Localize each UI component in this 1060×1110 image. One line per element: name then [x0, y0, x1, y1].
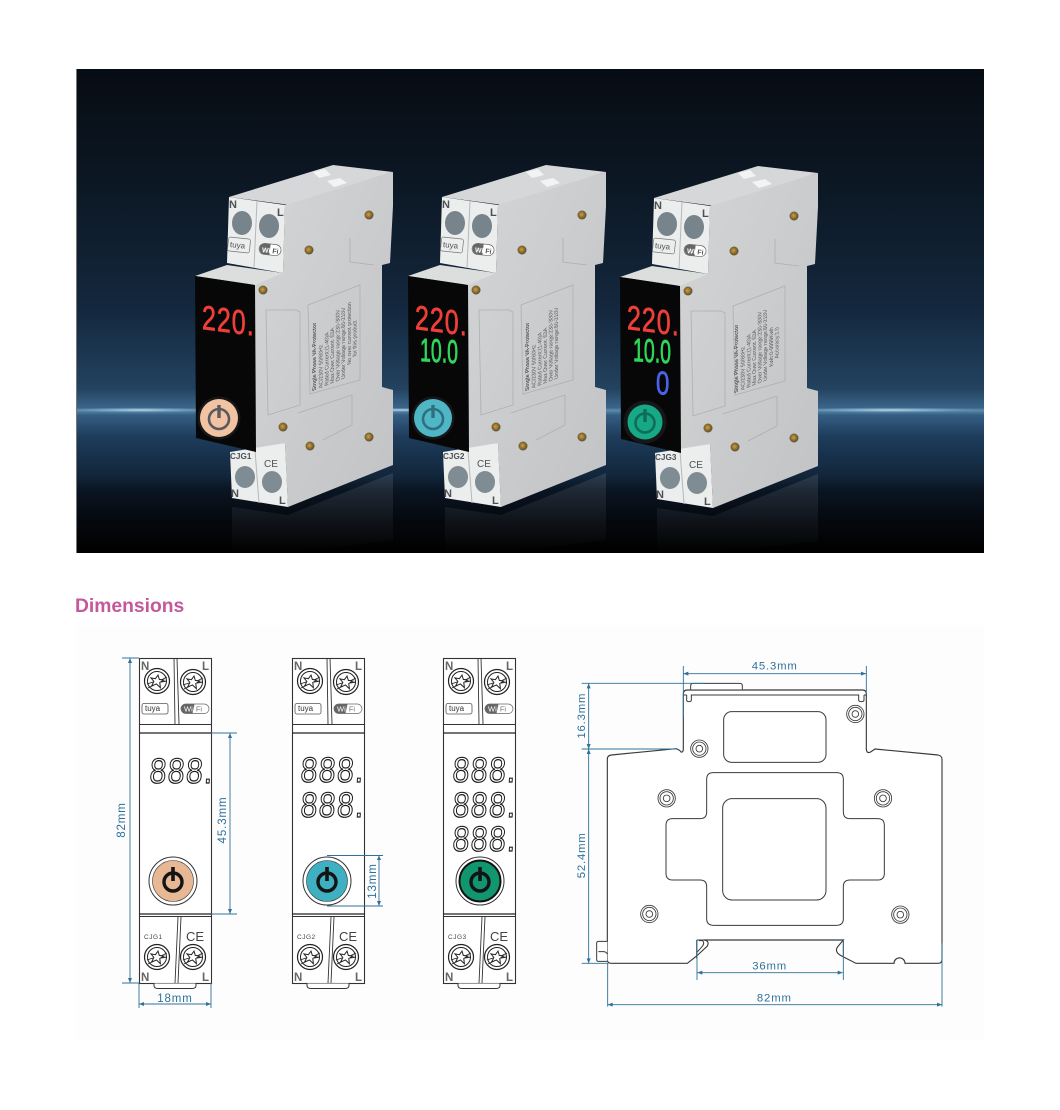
product label: AC/230V 50/60Hz	[741, 345, 746, 391]
product label: Single Phase VA-Protector	[312, 320, 318, 392]
terminal labels: CJG2	[443, 452, 465, 461]
dimension: 52.4mm	[576, 749, 608, 963]
seven-segment digits: 888.	[299, 750, 367, 790]
terminal labels: CE	[689, 460, 703, 471]
body outline	[607, 690, 942, 963]
terminal text	[445, 661, 513, 984]
terminal labels: L	[702, 208, 709, 220]
seven-segment digits: 888.	[451, 819, 519, 859]
terminal text: L	[506, 661, 513, 673]
dimension: 18mm	[139, 983, 211, 1008]
product label: Accuracy:1.0	[775, 326, 780, 359]
product label: Rated Current:(1-40)A	[325, 331, 330, 387]
terminal text: L	[202, 661, 209, 673]
terminal text: N	[294, 661, 302, 673]
terminal labels: CJG1	[230, 452, 252, 461]
reflection	[445, 473, 606, 553]
seven-segment digits: 888.	[148, 751, 216, 791]
dimension: 45.3mm: 45.3mm	[217, 797, 229, 843]
hero background	[76, 69, 984, 553]
terminal labels: L	[492, 495, 499, 507]
panel: dimension drawings	[76, 625, 984, 1040]
product label: AC/230V 50/60Hz	[532, 343, 537, 389]
terminal text: Wi Fi	[488, 704, 506, 714]
terminal text: tuya	[298, 704, 314, 713]
drawing: side view	[576, 661, 942, 1007]
dimension: 82mm	[116, 658, 139, 983]
terminal text: L	[202, 972, 209, 984]
drawing: CJG2 front view	[292, 658, 383, 988]
terminal labels	[442, 199, 499, 507]
seven-segment digits: 888.	[299, 785, 367, 825]
terminal labels: tuya	[655, 241, 671, 252]
seven-segment digits	[299, 750, 367, 825]
terminal text: L	[506, 972, 513, 984]
terminal text: N	[445, 661, 453, 673]
display: 220.: 220.	[415, 299, 468, 344]
product label: No over current protection	[347, 301, 353, 366]
terminal labels: L	[704, 496, 711, 508]
product label: Under Voltage range:80-210V	[763, 308, 769, 382]
seven-segment digits: 888.	[451, 785, 519, 825]
terminal labels: tuya	[443, 240, 459, 251]
terminal text: L	[355, 661, 362, 673]
dimension: 45.3mm: 45.3mm	[752, 661, 798, 673]
product label: Kwh:0-9999Kwh	[769, 326, 775, 368]
power button	[303, 857, 351, 905]
top inner edge	[683, 695, 866, 702]
product label: Single Phase VA-Protector	[734, 322, 740, 394]
dimension: 36mm	[697, 940, 843, 980]
terminal labels	[654, 200, 711, 508]
dimension: 82mm	[608, 943, 942, 1007]
terminal text: CE	[490, 929, 508, 944]
terminal labels: L	[277, 207, 284, 219]
terminal text: CE	[186, 929, 204, 944]
seven-segment digits: 888.	[451, 750, 519, 790]
inner recess	[723, 799, 826, 900]
terminal text: CE	[339, 929, 357, 944]
terminal labels: N	[654, 200, 662, 212]
terminal text: L	[355, 972, 362, 984]
drawing: CJG3 front view	[443, 658, 519, 988]
terminal text: N	[445, 972, 453, 984]
terminal text: N	[294, 972, 302, 984]
terminal text: Wi Fi	[184, 704, 202, 714]
seven-segment digits	[451, 750, 519, 859]
terminal text: Wi Fi	[337, 704, 355, 714]
terminal text: CJG2	[297, 934, 316, 941]
product label: Over Voltage range:230-300V	[549, 308, 554, 382]
display: 220.: 220.	[627, 299, 680, 344]
terminal labels: N	[229, 199, 237, 211]
dimension: 13mm: 13mm	[367, 863, 379, 899]
terminal labels: tuya	[230, 240, 246, 251]
product label	[312, 299, 358, 392]
device: CJG1 photo	[195, 165, 393, 553]
terminal labels: CJG3	[655, 453, 677, 462]
display: 10.0: 10.0	[420, 332, 458, 371]
dimension: 13mm	[327, 856, 383, 906]
display: 0: 0	[656, 365, 669, 403]
terminal labels: N	[231, 488, 239, 500]
terminal text: N	[141, 972, 149, 984]
drawing panel background	[76, 625, 984, 1040]
dimension: 16.3mm	[576, 683, 703, 749]
product label: Max Over Current: 63A	[543, 326, 549, 384]
hero photo panel	[70, 69, 984, 553]
display: 10.0: 10.0	[633, 332, 671, 371]
product label: Max Over Current: 63A	[330, 326, 336, 384]
terminal text	[141, 661, 209, 984]
label recess	[724, 712, 826, 762]
product label: Under Voltage range:80-210V	[341, 306, 347, 380]
mounting screws	[641, 705, 909, 923]
terminal labels: L	[279, 495, 286, 507]
product label: for this product	[353, 319, 358, 357]
horizon glow	[70, 408, 980, 412]
heading: Dimensions: Dimensions	[75, 596, 184, 617]
terminal text: CJG3	[448, 934, 467, 941]
cross recess	[666, 773, 884, 925]
terminal text: tuya	[145, 704, 161, 713]
display: 220.: 220.	[202, 299, 255, 344]
product label	[734, 303, 780, 394]
terminal labels	[229, 199, 286, 507]
terminal text: N	[141, 661, 149, 673]
product label: AC/230V 50/60Hz	[319, 343, 324, 389]
dimension: 45.3mm	[211, 733, 237, 914]
latch	[597, 941, 607, 961]
power button	[412, 396, 454, 440]
dimension: 82mm: 82mm	[116, 802, 128, 838]
dimension: 82mm: 82mm	[757, 992, 792, 1004]
product label	[525, 306, 560, 392]
power button	[198, 396, 240, 440]
product label: Rated Current:(1-40)A	[538, 331, 543, 387]
product label: Max Over Current: 63A	[752, 328, 758, 386]
power button	[149, 857, 197, 905]
top tab	[691, 683, 742, 689]
product label: Under Voltage range:80-210V	[554, 306, 560, 380]
terminal text: CJG1	[144, 934, 163, 941]
terminal labels: N	[444, 488, 452, 500]
terminal labels: CE	[264, 459, 278, 470]
terminal text: tuya	[449, 704, 465, 713]
product label: Over Voltage range:230-300V	[758, 310, 763, 384]
terminal labels: Wi Fi	[475, 247, 492, 256]
terminal labels: CE	[477, 459, 491, 470]
product label: Over Voltage range:230-300V	[336, 308, 341, 382]
dimension: 18mm: 18mm	[157, 993, 193, 1005]
reflection	[232, 473, 393, 553]
dimension: 45.3mm	[683, 661, 866, 717]
drawing: CJG1 front view	[116, 658, 237, 1008]
terminal labels: L	[490, 207, 497, 219]
product label: Single Phase VA-Protector	[525, 320, 531, 392]
dimension: 36mm: 36mm	[752, 960, 787, 972]
rail clip	[697, 940, 843, 958]
terminal labels: Wi Fi	[262, 247, 279, 256]
power button	[624, 400, 666, 444]
power button	[456, 857, 504, 905]
terminal labels: N	[442, 199, 450, 211]
terminal text	[294, 661, 362, 984]
dimension: 16.3mm: 16.3mm	[576, 693, 588, 739]
product label: Rated Current:(1-40)A	[747, 333, 752, 389]
device: CJG2 photo	[408, 165, 606, 553]
terminal labels: Wi Fi	[687, 248, 704, 257]
device: CJG3 photo	[620, 166, 818, 553]
terminal labels: N	[656, 489, 664, 501]
reflection	[657, 474, 818, 553]
dimension: 52.4mm: 52.4mm	[576, 832, 588, 878]
